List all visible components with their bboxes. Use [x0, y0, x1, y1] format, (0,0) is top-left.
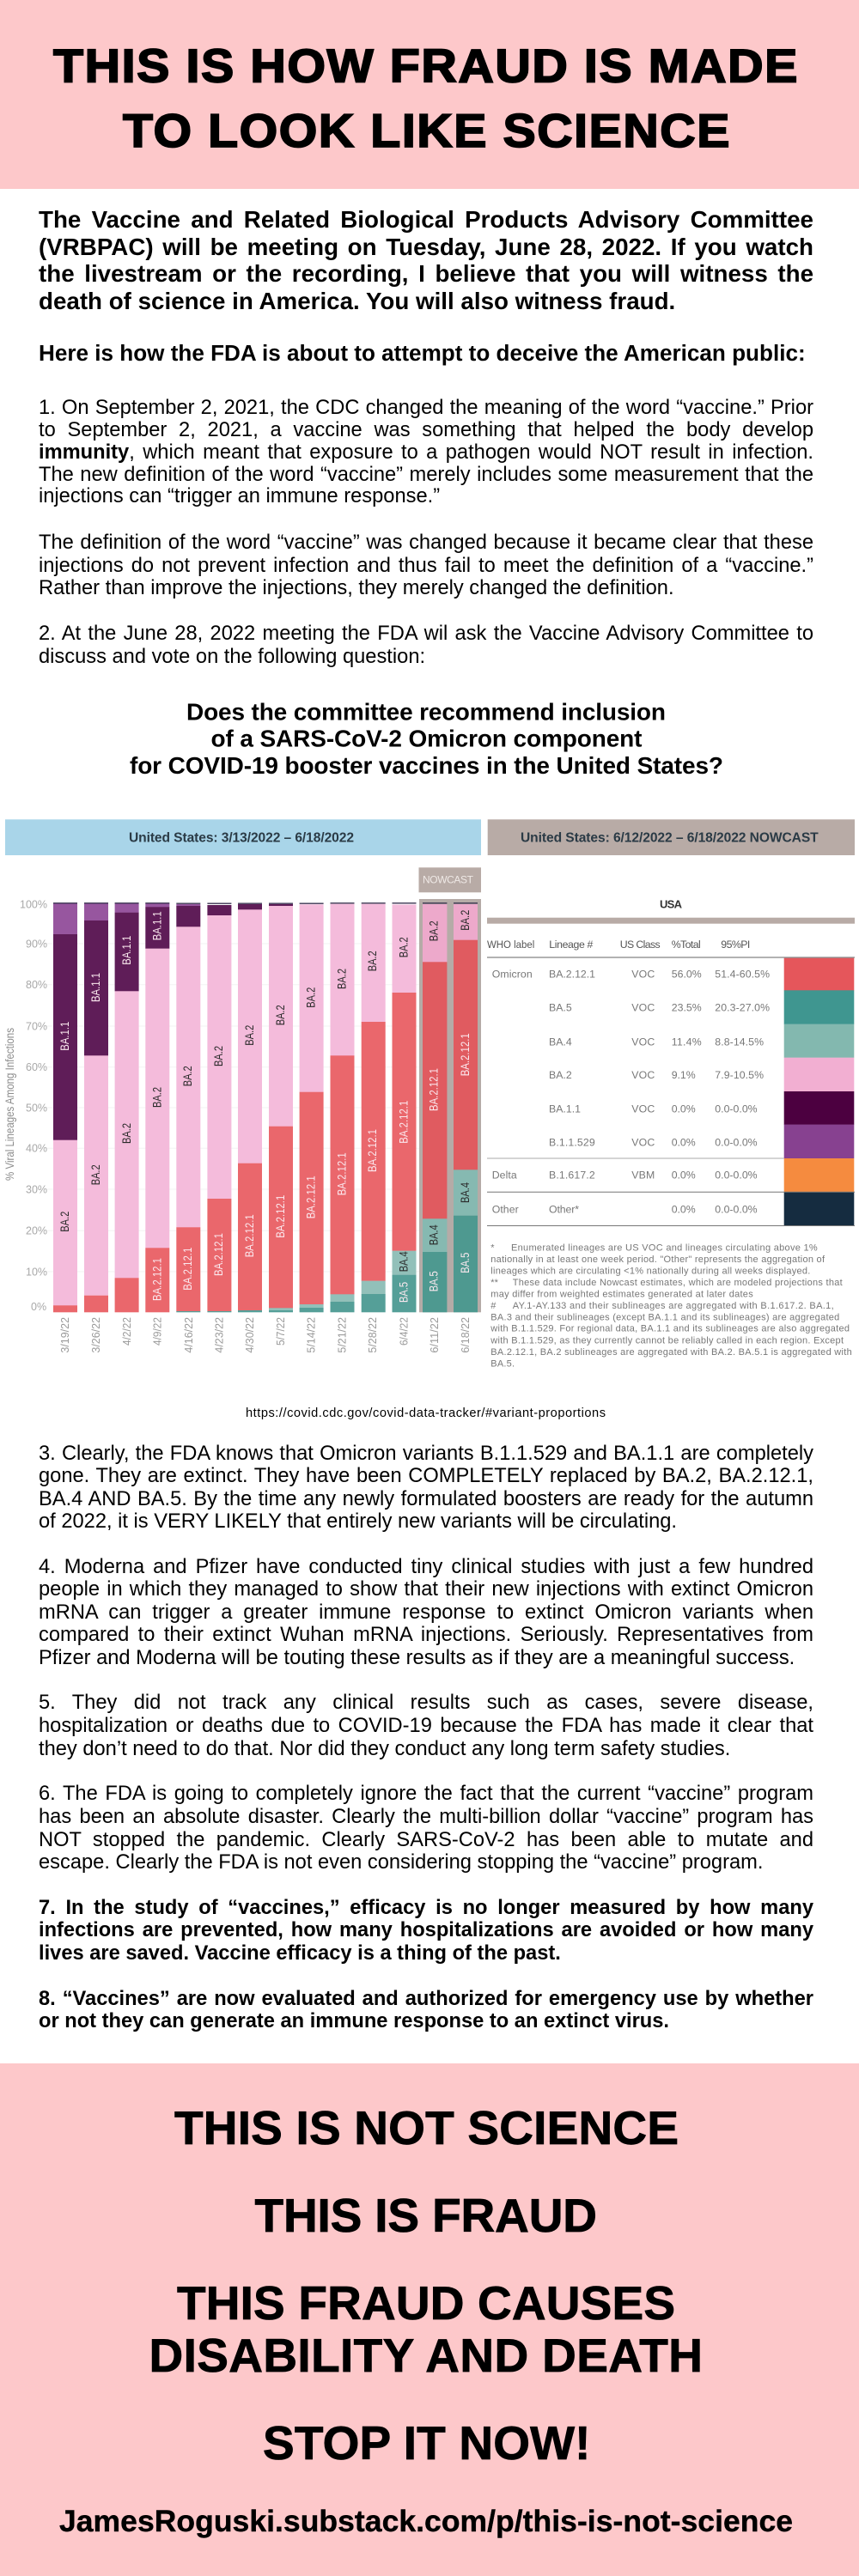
closing statement: not science: THIS IS NOT SCIENCE	[174, 2101, 679, 2154]
table footnotes: may differ from weighted estimates generated at later dates	[490, 1289, 753, 1299]
bar 5/28/22	[362, 904, 386, 1312]
bar 3/19/22	[53, 903, 77, 1312]
table rows: VOC	[631, 1036, 655, 1048]
bar value labels: BA.2	[428, 920, 440, 941]
bar value labels: BA.2	[243, 1025, 256, 1046]
x axis date labels: 4/23/22	[213, 1317, 225, 1353]
paragraph 5: they don’t need to do that. Nor did they conduct any long term safety studies.	[39, 1738, 730, 1760]
table rows: B.1.617.2	[549, 1170, 595, 1182]
bar value labels: BA.4	[428, 1224, 440, 1245]
bar value labels: BA.2.12.1	[181, 1248, 194, 1291]
table footnotes: BA.2.12.1, BA.2 sublineages are aggregated with BA.2. BA.5.1 is aggregated with	[490, 1347, 852, 1358]
table footnotes: AY.1-AY.133 and their sublineages are aggregated with B.1.617.2. BA.1,	[513, 1301, 834, 1311]
bar value labels: BA.2.12.1	[366, 1129, 379, 1172]
bar value labels: BA.1.1	[120, 936, 133, 965]
table rows: VOC	[631, 1002, 655, 1014]
paragraph 5	[39, 1692, 813, 1760]
table rows: VOC	[631, 1103, 655, 1115]
paragraph: definition changed: injections do not prevent infection and thus fail to meet the definition of a “vaccine.”	[39, 555, 813, 577]
table rows: B.1.1.529	[549, 1136, 595, 1148]
bar value labels: BA.2	[58, 1212, 71, 1232]
paragraph 6: 6. The FDA is going to completely ignore the fact that the current “vaccine” program	[39, 1783, 813, 1805]
paragraph 4: people in which they managed to show that their new injections with extinct Omicron	[39, 1578, 813, 1601]
panel: closing banner	[0, 2063, 859, 2576]
paragraph 1: to September 2, 2021, a vaccine was something that helped the body develop	[39, 419, 813, 441]
bar value labels: BA.2.12.1	[151, 1258, 163, 1301]
bar value labels: BA.2	[459, 910, 472, 931]
paragraph 5: 5. They did not track any clinical results such as cases, severe disease,	[39, 1692, 813, 1714]
nowcast tag: NOWCAST	[423, 874, 474, 886]
table rows: 0.0-0.0%	[715, 1170, 758, 1182]
table rows: 7.9-10.5%	[715, 1069, 764, 1081]
source link: https://covid.cdc.gov/covid-data-tracker/#variant-proportions	[246, 1406, 606, 1420]
paragraph 8 (bold): 8. “Vaccines” are now evaluated and authorized for emergency use by whether	[39, 1987, 813, 2009]
y axis labels	[3, 898, 419, 1313]
table footnotes: with B.1.1.529. For regional data, BA.1.1 and its sublineages are also aggregated	[490, 1324, 850, 1334]
intro paragraph	[39, 206, 813, 314]
bar value labels: BA.4	[397, 1251, 411, 1272]
bar value labels: BA.2.12.1	[428, 1068, 440, 1111]
chart header	[5, 819, 481, 855]
table rows	[492, 969, 770, 1215]
x axis date labels: 3/26/22	[89, 1317, 102, 1353]
legend colour swatches	[784, 958, 854, 1225]
FDA question: Does the committee recommend inclusion	[186, 698, 666, 725]
paragraph 8 (bold)	[39, 1987, 813, 2032]
paragraph 7 (bold): 7. In the study of “vaccines,” efficacy is no longer measured by how many	[39, 1896, 813, 1918]
bar value labels: BA.2	[181, 1066, 194, 1086]
x axis date labels: 4/2/22	[120, 1317, 133, 1346]
paragraph 4: Pfizer and Moderna will be touting these results as if they are a meaningful success.	[39, 1647, 795, 1669]
intro paragraph: The Vaccine and Related Biological Products Advisory Committee	[39, 206, 813, 233]
FDA question: of a SARS-CoV-2 Omicron component	[211, 725, 643, 751]
bar value labels: BA.2	[366, 951, 379, 971]
table rows: VOC	[631, 1069, 655, 1081]
panel: nowcast table	[487, 819, 855, 1370]
table column headers: 95%PI	[721, 939, 750, 951]
table footnotes: *	[490, 1243, 495, 1254]
table rows: 9.1%	[672, 1069, 696, 1081]
table footnotes: These data include Nowcast estimates, which are modeled projections that	[513, 1278, 843, 1288]
y axis labels: 80%	[26, 979, 47, 991]
table rows: 56.0%	[672, 969, 702, 981]
bar value labels: BA.2.12.1	[459, 1033, 472, 1076]
bar value labels: BA.2.12.1	[212, 1233, 225, 1276]
table footnotes: #	[490, 1301, 497, 1311]
paragraph 7 (bold): lives are saved. Vaccine efficacy is a thing of the past.	[39, 1942, 561, 1965]
paragraph 6: NOT stopped the pandemic. Clearly SARS-CoV-2 has been able to mutate and	[39, 1829, 813, 1851]
table rows: 0.0%	[672, 1203, 696, 1215]
bar 4/2/22	[115, 903, 139, 1312]
bar 6/4/22	[392, 905, 416, 1312]
nowcast header: United States: 6/12/2022 – 6/18/2022 NOWCAST	[521, 831, 819, 846]
table rows: BA.4	[549, 1036, 572, 1048]
bar value labels: BA.2	[397, 937, 411, 957]
table rows: VOC	[631, 1136, 655, 1148]
paragraph 4: 4. Moderna and Pfizer have conducted tiny clinical studies with just a few hundred	[39, 1556, 813, 1578]
paragraph 3: gone. They are extinct. They have been COMPLETELY replaced by BA.2, BA.2.12.1,	[39, 1465, 813, 1487]
table rows: 11.4%	[672, 1036, 702, 1048]
bar 4/30/22	[238, 904, 262, 1312]
paragraph: definition changed: Rather than improve the injections, they merely changed the definition.	[39, 577, 674, 599]
panel: variant proportions chart	[3, 819, 481, 1353]
bar value labels: BA.1.1	[151, 911, 163, 940]
y axis labels: 100%	[20, 898, 47, 910]
table region label	[487, 898, 855, 924]
table rows: VOC	[631, 969, 655, 981]
table rows: 0.0%	[672, 1170, 696, 1182]
table rows: 20.3-27.0%	[715, 1002, 770, 1014]
bar value labels: BA.2	[120, 1123, 133, 1144]
paragraph 3: 3. Clearly, the FDA knows that Omicron variants B.1.1.529 and BA.1.1 are completely	[39, 1443, 813, 1465]
table rows: Delta	[492, 1170, 517, 1182]
table rows: BA.1.1	[549, 1103, 581, 1115]
y axis labels: 50%	[26, 1103, 47, 1115]
table footnotes: **	[490, 1278, 499, 1288]
article link: JamesRoguski.substack.com/p/this-is-not-science	[59, 2504, 793, 2538]
bar value labels: BA.5	[459, 1253, 472, 1273]
bar value labels: BA.4	[459, 1182, 472, 1203]
bar 4/23/22	[207, 905, 231, 1312]
y axis labels: 70%	[26, 1020, 47, 1032]
y axis labels: 60%	[26, 1061, 47, 1073]
FDA question	[130, 698, 723, 779]
table rows: Omicron	[492, 969, 533, 981]
paragraph 6	[39, 1783, 813, 1874]
x axis date labels: 5/28/22	[366, 1317, 379, 1353]
FDA question: for COVID-19 booster vaccines in the United States?	[130, 752, 723, 779]
stacked bars	[53, 903, 478, 1312]
y axis labels: 40%	[26, 1142, 47, 1154]
title: TO LOOK LIKE SCIENCE	[123, 104, 731, 157]
paragraph 2: discuss and vote on the following question:	[39, 646, 425, 668]
chart header: United States: 3/13/2022 – 6/18/2022	[129, 831, 354, 846]
bar 6/18/22 nowcast	[454, 904, 478, 1312]
table column headers: Lineage #	[549, 939, 593, 951]
paragraph 5: hospitalization or deaths due to COVID-19 because the FDA has made it clear that	[39, 1715, 813, 1737]
paragraph 1: The new definition of the word “vaccine” merely includes some measurement that the	[39, 464, 813, 486]
x axis date labels: 5/21/22	[335, 1317, 349, 1353]
bar value labels: BA.2.12.1	[243, 1214, 256, 1257]
paragraph 4: compared to their extinct Wuhan mRNA injections. Seriously. Representatives from	[39, 1624, 813, 1646]
table rows: BA.2	[549, 1069, 572, 1081]
bar value labels: BA.2	[212, 1046, 225, 1066]
table footnotes	[490, 1243, 852, 1370]
paragraph 2	[39, 623, 813, 668]
x axis date labels: 3/19/22	[58, 1317, 71, 1353]
table column headers	[487, 939, 750, 951]
x axis date labels: 4/16/22	[182, 1317, 195, 1353]
paragraph 1	[39, 397, 813, 507]
bar 6/11/22 nowcast	[423, 904, 447, 1312]
panel: title banner	[0, 0, 859, 189]
bar value labels: BA.2.12.1	[397, 1101, 411, 1144]
y axis labels: 90%	[26, 938, 47, 950]
paragraph 1: 1. On September 2, 2021, the CDC changed the meaning of the word “vaccine.” Prior	[39, 397, 813, 419]
table rows: 23.5%	[672, 1002, 702, 1014]
table footnotes: BA.5.	[490, 1359, 515, 1370]
table rows: 8.8-14.5%	[715, 1036, 764, 1048]
bar value labels: BA.2	[274, 1005, 287, 1025]
intro paragraph: death of science in America. You will also witness fraud.	[39, 288, 675, 314]
bar 4/16/22	[176, 904, 200, 1312]
bar value labels: BA.2	[335, 969, 349, 989]
paragraph: definition changed	[39, 532, 813, 599]
y axis labels: 10%	[26, 1266, 47, 1278]
paragraph 4	[39, 1556, 813, 1669]
table footnotes: Enumerated lineages are US VOC and lineages circulating above 1%	[511, 1243, 818, 1254]
table footnotes: nationally in at least one week period. "Other" represents the aggregation of	[490, 1255, 825, 1265]
table column headers: %Total	[672, 939, 701, 951]
intro paragraph: (VRBPAC) will be meeting on Tuesday, June 28, 2022. If you watch	[39, 234, 813, 260]
paragraph 3	[39, 1443, 813, 1533]
paragraph 1: injections can “trigger an immune response.”	[39, 485, 440, 507]
table footnotes: BA.3 and their sublineages (except BA.1.1 and its sublineages) are aggregated	[490, 1312, 839, 1322]
table rows: Other	[492, 1203, 519, 1215]
x axis date labels	[58, 1317, 472, 1353]
paragraph 8 (bold): or not they can generate an immune response to an extinct virus.	[39, 2010, 669, 2032]
bar 3/26/22	[84, 903, 108, 1312]
y axis labels: 30%	[26, 1183, 47, 1195]
bar 5/7/22	[269, 904, 293, 1312]
paragraph: definition changed: The definition of the word “vaccine” was changed because it became clear that these	[39, 532, 813, 554]
table region label: USA	[660, 898, 683, 911]
table footnotes: lineages which are circulating <1% nationally during all weeks displayed.	[490, 1266, 810, 1276]
bar value labels: BA.2.12.1	[335, 1152, 349, 1195]
table rows: 0.0-0.0%	[715, 1136, 758, 1148]
table column headers: WHO label	[487, 939, 534, 951]
intro paragraph: the livestream or the recording, I believe that you will witness the	[39, 260, 813, 287]
closing statement: disability and death: DISABILITY AND DEATH	[149, 2329, 703, 2382]
x axis date labels: 4/30/22	[243, 1317, 256, 1353]
table rows: VBM	[631, 1170, 655, 1182]
bar value labels: BA.2.12.1	[304, 1176, 318, 1218]
paragraph 7 (bold): infections are prevented, how many hospitalizations are avoided or how many	[39, 1919, 813, 1941]
bar value labels: BA.2.12.1	[274, 1195, 287, 1238]
closing statement: disability and death	[149, 2276, 703, 2382]
table rows: 0.0-0.0%	[715, 1203, 758, 1215]
x axis date labels: 4/9/22	[151, 1317, 163, 1346]
paragraph 3: of 2022, it is VERY LIKELY that entirely new variants will be circulating.	[39, 1510, 677, 1533]
title	[53, 39, 799, 157]
x axis date labels: 6/4/22	[397, 1317, 411, 1346]
y axis labels: 20%	[26, 1224, 47, 1236]
bar value labels: BA.2	[89, 1164, 102, 1185]
table rows: BA.5	[549, 1002, 572, 1014]
y axis labels: 0%	[31, 1301, 46, 1313]
table footnotes: with B.1.1.529, as they currently cannot be reliably called in each region. Except	[490, 1335, 844, 1346]
table rows: 0.0%	[672, 1136, 696, 1148]
closing statement: disability and death: THIS FRAUD CAUSES	[177, 2276, 675, 2330]
bar 5/14/22	[300, 904, 324, 1312]
lead-in sentence: Here is how the FDA is about to attempt to deceive the American public:	[39, 340, 806, 366]
paragraph 7 (bold)	[39, 1896, 813, 1965]
paragraph 4: mRNA can trigger a greater immune response to extinct Omicron variants when	[39, 1601, 813, 1624]
paragraph 1: immunity, which meant that exposure to a pathogen would NOT result in infection.	[39, 441, 813, 464]
closing statement: stop it now: STOP IT NOW!	[263, 2416, 591, 2470]
bar value labels: BA.2	[151, 1087, 163, 1108]
bar value labels: BA.5	[397, 1282, 411, 1303]
table rows: 0.0%	[672, 1103, 696, 1115]
bar value labels: BA.1.1	[58, 1022, 71, 1051]
bar 4/9/22	[145, 903, 169, 1312]
x axis date labels: 6/18/22	[459, 1317, 472, 1353]
paragraph 6: escape. Clearly the FDA is not even considering stopping the “vaccine” program.	[39, 1851, 763, 1874]
table rows: BA.2.12.1	[549, 969, 595, 981]
bar value labels: BA.1.1	[89, 973, 102, 1002]
nowcast tag	[419, 867, 481, 892]
paragraph 2: 2. At the June 28, 2022 meeting the FDA wil ask the Vaccine Advisory Committee to	[39, 623, 813, 645]
y axis labels: % Viral Lineages Among Infections	[3, 1028, 16, 1181]
table rows: 51.4-60.5%	[715, 969, 770, 981]
x axis date labels: 5/7/22	[274, 1317, 287, 1346]
title: THIS IS HOW FRAUD IS MADE	[53, 39, 799, 93]
nowcast header	[488, 819, 855, 855]
paragraph 6: has been an absolute disaster. Clearly the multi-billion dollar “vaccine” program has	[39, 1806, 813, 1828]
table column headers: US Class	[620, 939, 661, 951]
table rows: 0.0-0.0%	[715, 1103, 758, 1115]
closing statement: fraud: THIS IS FRAUD	[254, 2189, 597, 2242]
bar value labels: BA.5	[428, 1271, 440, 1291]
table rows: Other*	[549, 1203, 579, 1215]
x axis date labels: 6/11/22	[428, 1317, 441, 1353]
bar value labels: BA.2	[304, 987, 318, 1008]
paragraph 3: BA.4 AND BA.5. By the time any newly formulated boosters are ready for the autumn	[39, 1488, 813, 1510]
bar value labels	[58, 910, 472, 1303]
x axis date labels: 5/14/22	[304, 1317, 318, 1353]
bar 5/21/22	[330, 904, 354, 1312]
